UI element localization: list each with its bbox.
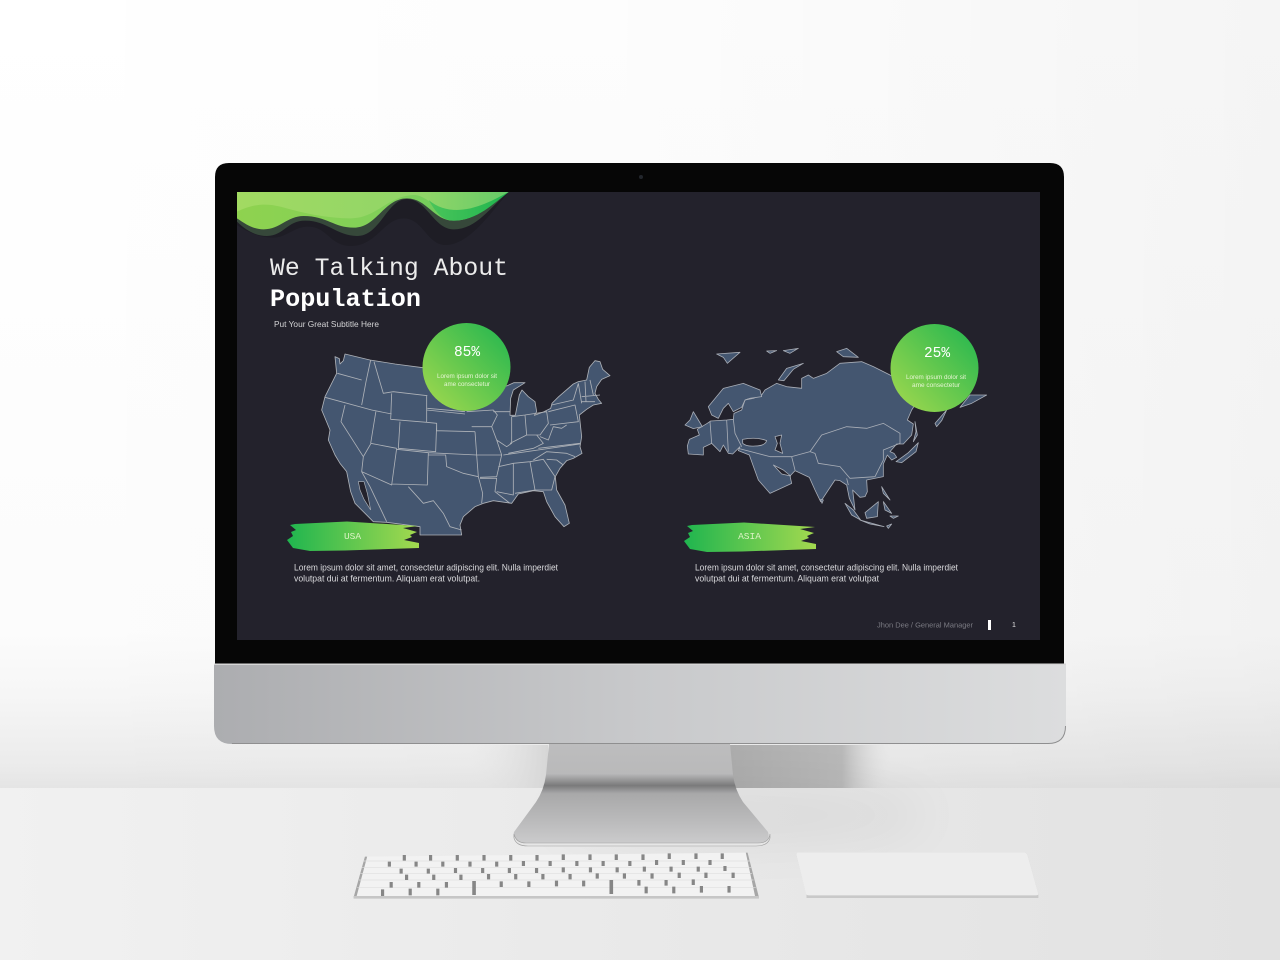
description: USA: Lorem ipsum dolor sit amet, consectetur adipiscing elit. Nulla imperdiet — [294, 562, 558, 572]
subtitle: Put Your Great Subtitle Here — [274, 319, 379, 329]
callout: USA 85%: Lorem ipsum dolor sit — [437, 374, 497, 380]
footer: Jhon Dee / General Manager — [877, 622, 974, 630]
callout: Asia 25%: ame consectetur — [912, 383, 960, 389]
callout: Asia 25%: 25% — [924, 346, 950, 362]
callout: USA 85%: ame consectetur — [444, 382, 490, 388]
callout: Asia 25%: Lorem ipsum dolor sit — [906, 375, 966, 381]
trackpad — [796, 852, 1038, 898]
title: Population — [270, 285, 421, 314]
map: USA — [322, 354, 610, 535]
keyboard — [354, 853, 759, 899]
brush label: Asia — [684, 522, 816, 552]
callout: USA 85% — [422, 323, 510, 411]
slide screen — [237, 192, 1040, 640]
decorative green wave header — [237, 192, 509, 246]
title: We Talking About — [270, 255, 508, 283]
callout: USA 85%: 85% — [454, 345, 480, 361]
monitor stand — [513, 744, 770, 846]
description: Asia: Lorem ipsum dolor sit amet, consectetur adipiscing elit. Nulla imperdiet — [695, 562, 958, 572]
footer — [877, 620, 1016, 630]
brush label: Asia: ASIA — [738, 531, 761, 542]
brush label: USA: USA — [344, 531, 361, 542]
monitor body — [214, 163, 1066, 744]
footer: 1 — [1012, 622, 1016, 629]
description: Asia: volutpat dui at fermentum. Aliquam erat volutpat — [695, 574, 879, 584]
description: USA: volutpat dui at fermentum. Aliquam erat volutpat. — [294, 574, 480, 584]
brush label: USA — [287, 522, 419, 551]
map: Asia — [685, 348, 987, 528]
callout: Asia 25% — [890, 324, 978, 412]
title — [270, 255, 508, 314]
